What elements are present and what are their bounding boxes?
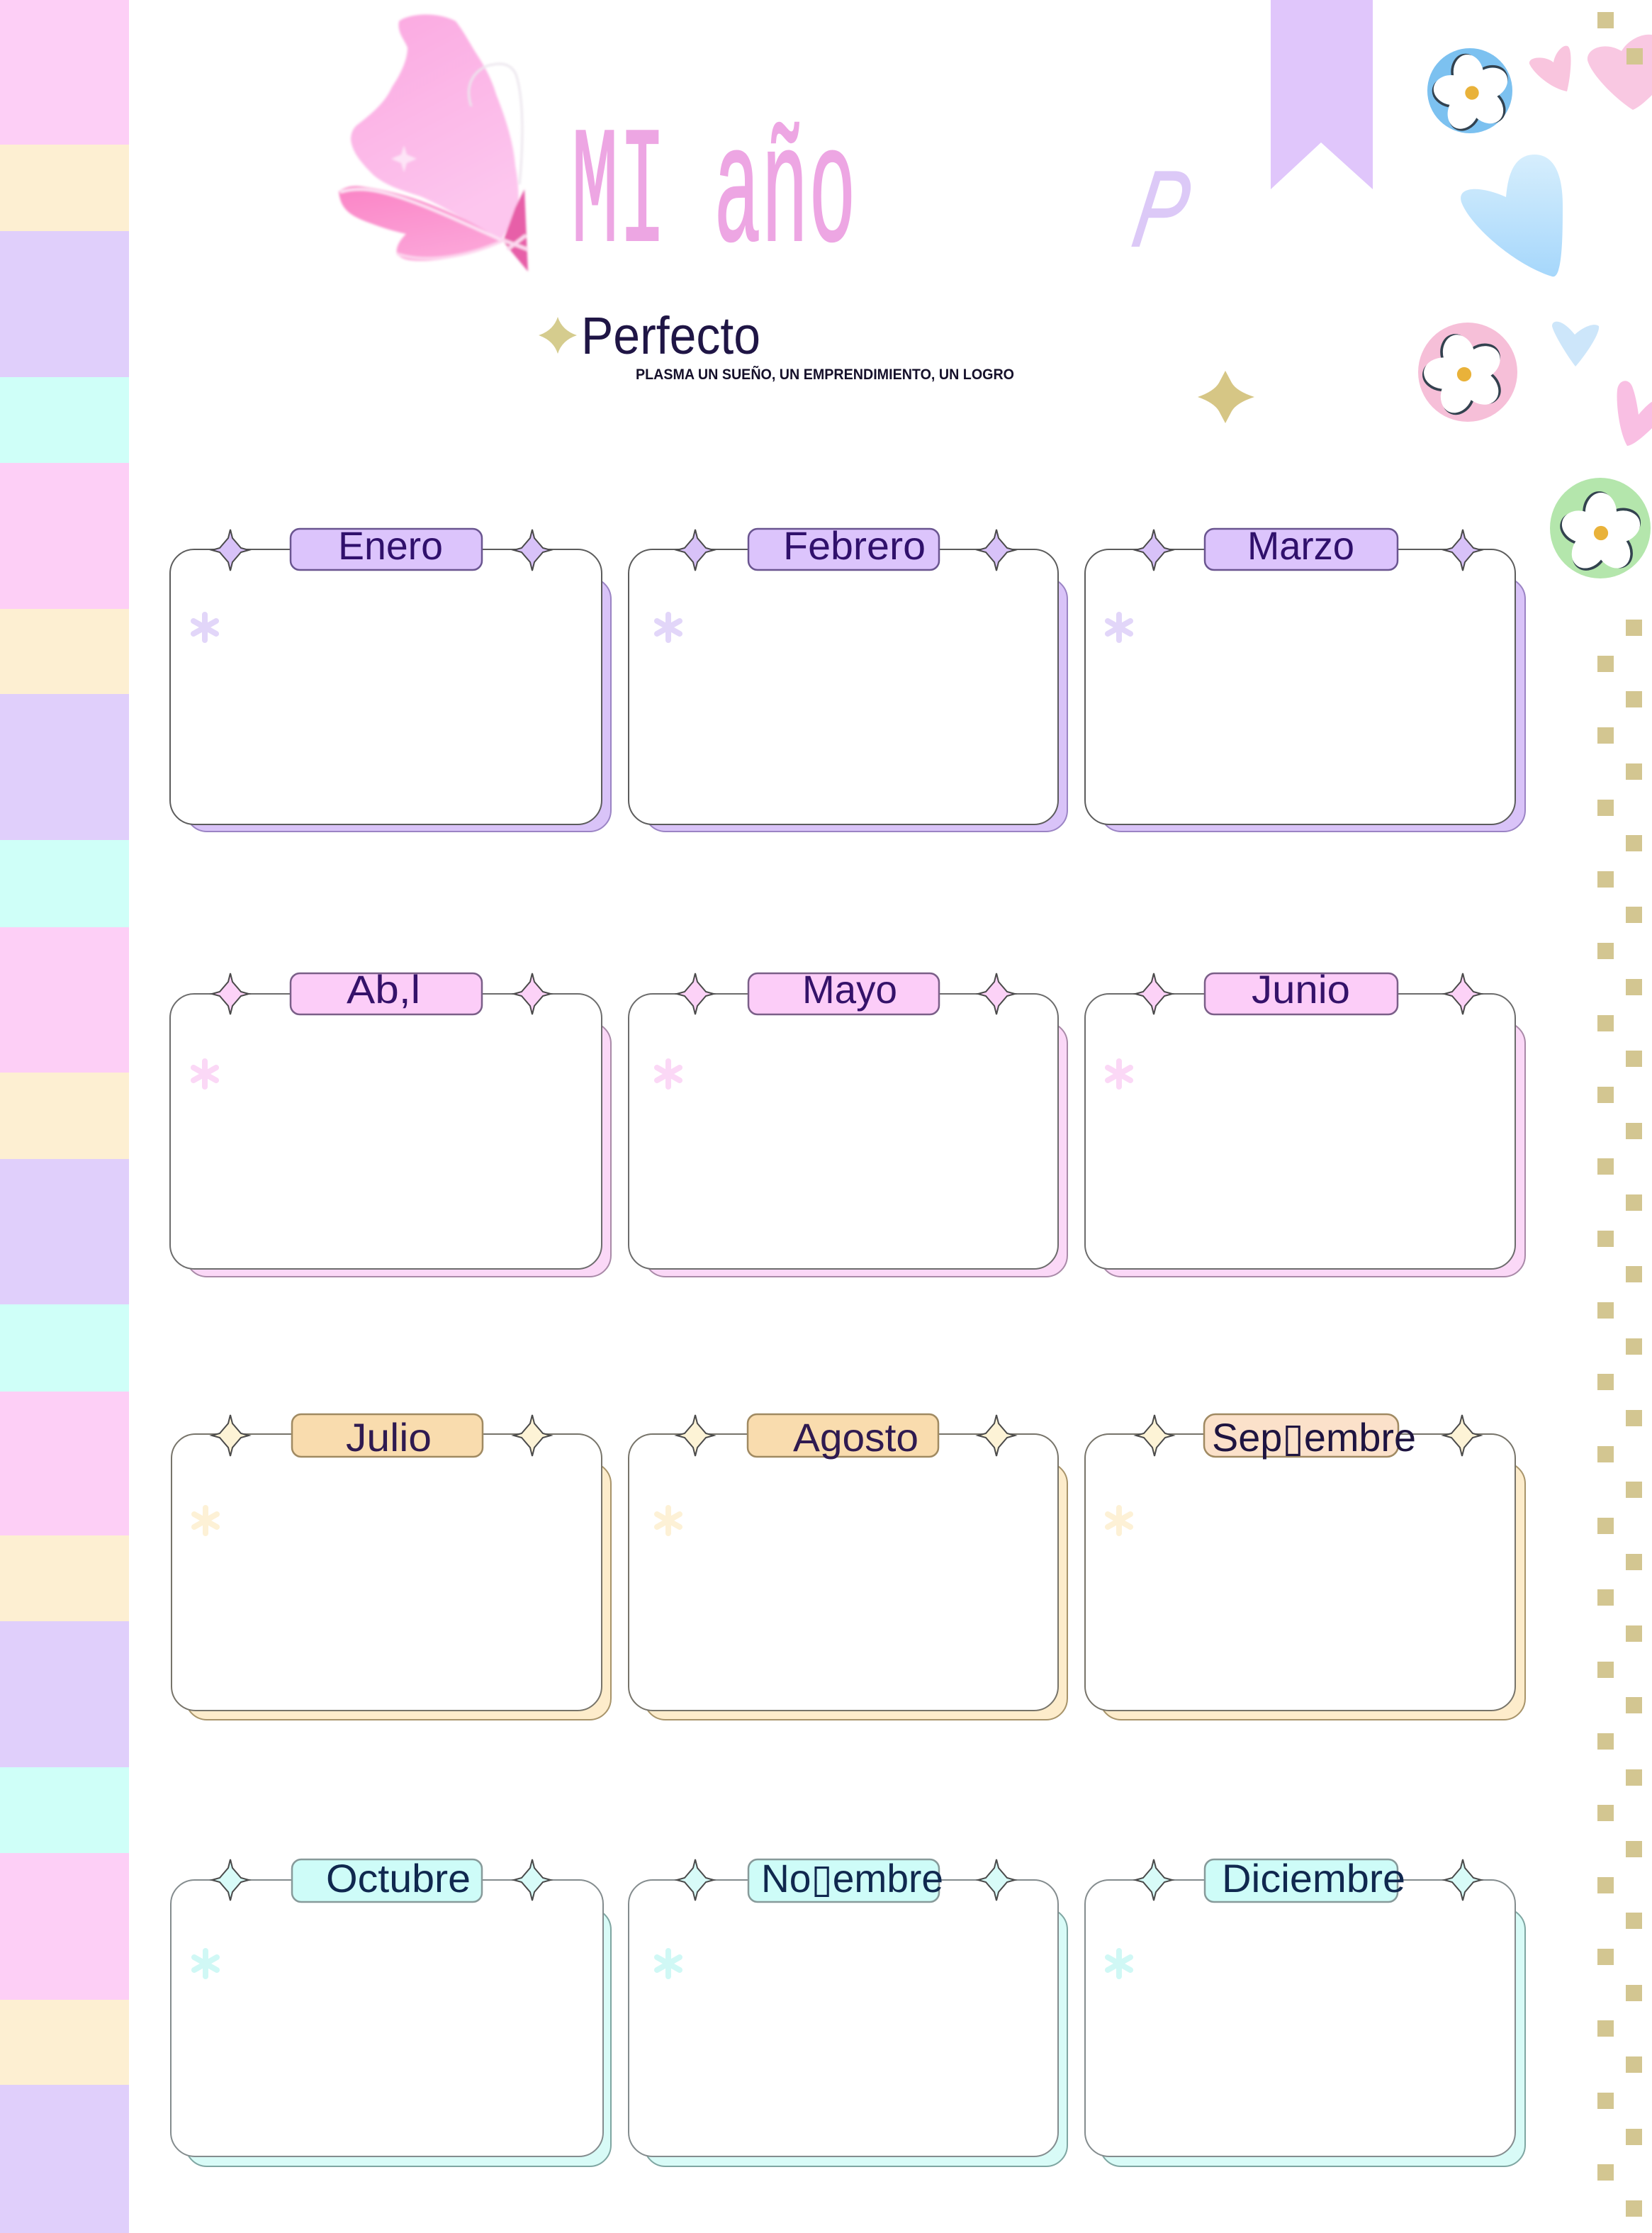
bookmark ribbon <box>1271 0 1373 189</box>
icon: gold sparkle <box>1198 371 1254 423</box>
panel: Noviembre: No▯embre <box>761 1856 943 1901</box>
panel: Junio: Junio <box>1252 967 1350 1012</box>
panel: Mayo: Mayo <box>802 967 897 1012</box>
panel: Febrero <box>629 523 1067 832</box>
icon: pink butterfly <box>339 15 528 272</box>
title: MI año <box>571 103 856 291</box>
panel: Diciembre: Diciembre <box>1222 1856 1405 1901</box>
icon: pink flower <box>1412 323 1517 427</box>
panel: Agosto: Agosto <box>793 1415 918 1460</box>
icon: green flower <box>1550 478 1651 578</box>
panel: Mayo <box>629 967 1067 1277</box>
panel: Febrero: Febrero <box>783 523 926 568</box>
panel: Enero: Enero <box>338 523 443 568</box>
panel: Marzo: Marzo <box>1247 523 1354 568</box>
panel: Marzo <box>1085 523 1525 832</box>
icon: small gold sparkle <box>539 317 577 354</box>
tagline: PLASMA UN SUEÑO, UN EMPRENDIMIENTO, UN LOGRO <box>636 366 1014 383</box>
panel: Diciembre <box>1085 1856 1525 2166</box>
panel: Enero <box>170 523 611 832</box>
panel: Abril: Ab,l <box>347 967 420 1012</box>
panel: Octubre <box>171 1856 611 2166</box>
panel: Julio: Julio <box>346 1415 432 1460</box>
panel: Noviembre <box>629 1856 1067 2166</box>
icon: small blue heart <box>1552 322 1599 366</box>
panel: Julio <box>172 1414 611 1720</box>
icon: large pink heart <box>1588 35 1652 110</box>
subtitle group <box>539 306 1014 383</box>
panel: Junio <box>1085 967 1525 1277</box>
icon: right pink heart <box>1617 381 1652 446</box>
heading: Perfecto: Perfecto <box>581 306 760 365</box>
decorative letter P: P <box>1125 149 1198 269</box>
icon: large blue heart <box>1461 155 1563 276</box>
panel: Octubre: Octubre <box>326 1856 471 1901</box>
panel: Agosto <box>629 1414 1067 1720</box>
icon: small pink heart <box>1529 46 1571 91</box>
dotted gold border <box>1597 12 1643 2217</box>
icon: blue flower <box>1424 47 1520 140</box>
panel: Septiembre: Sep▯embre <box>1212 1415 1416 1460</box>
left colour stripes sidebar <box>0 0 129 2233</box>
panel: Septiembre <box>1085 1414 1525 1720</box>
panel: Abril <box>170 967 611 1277</box>
